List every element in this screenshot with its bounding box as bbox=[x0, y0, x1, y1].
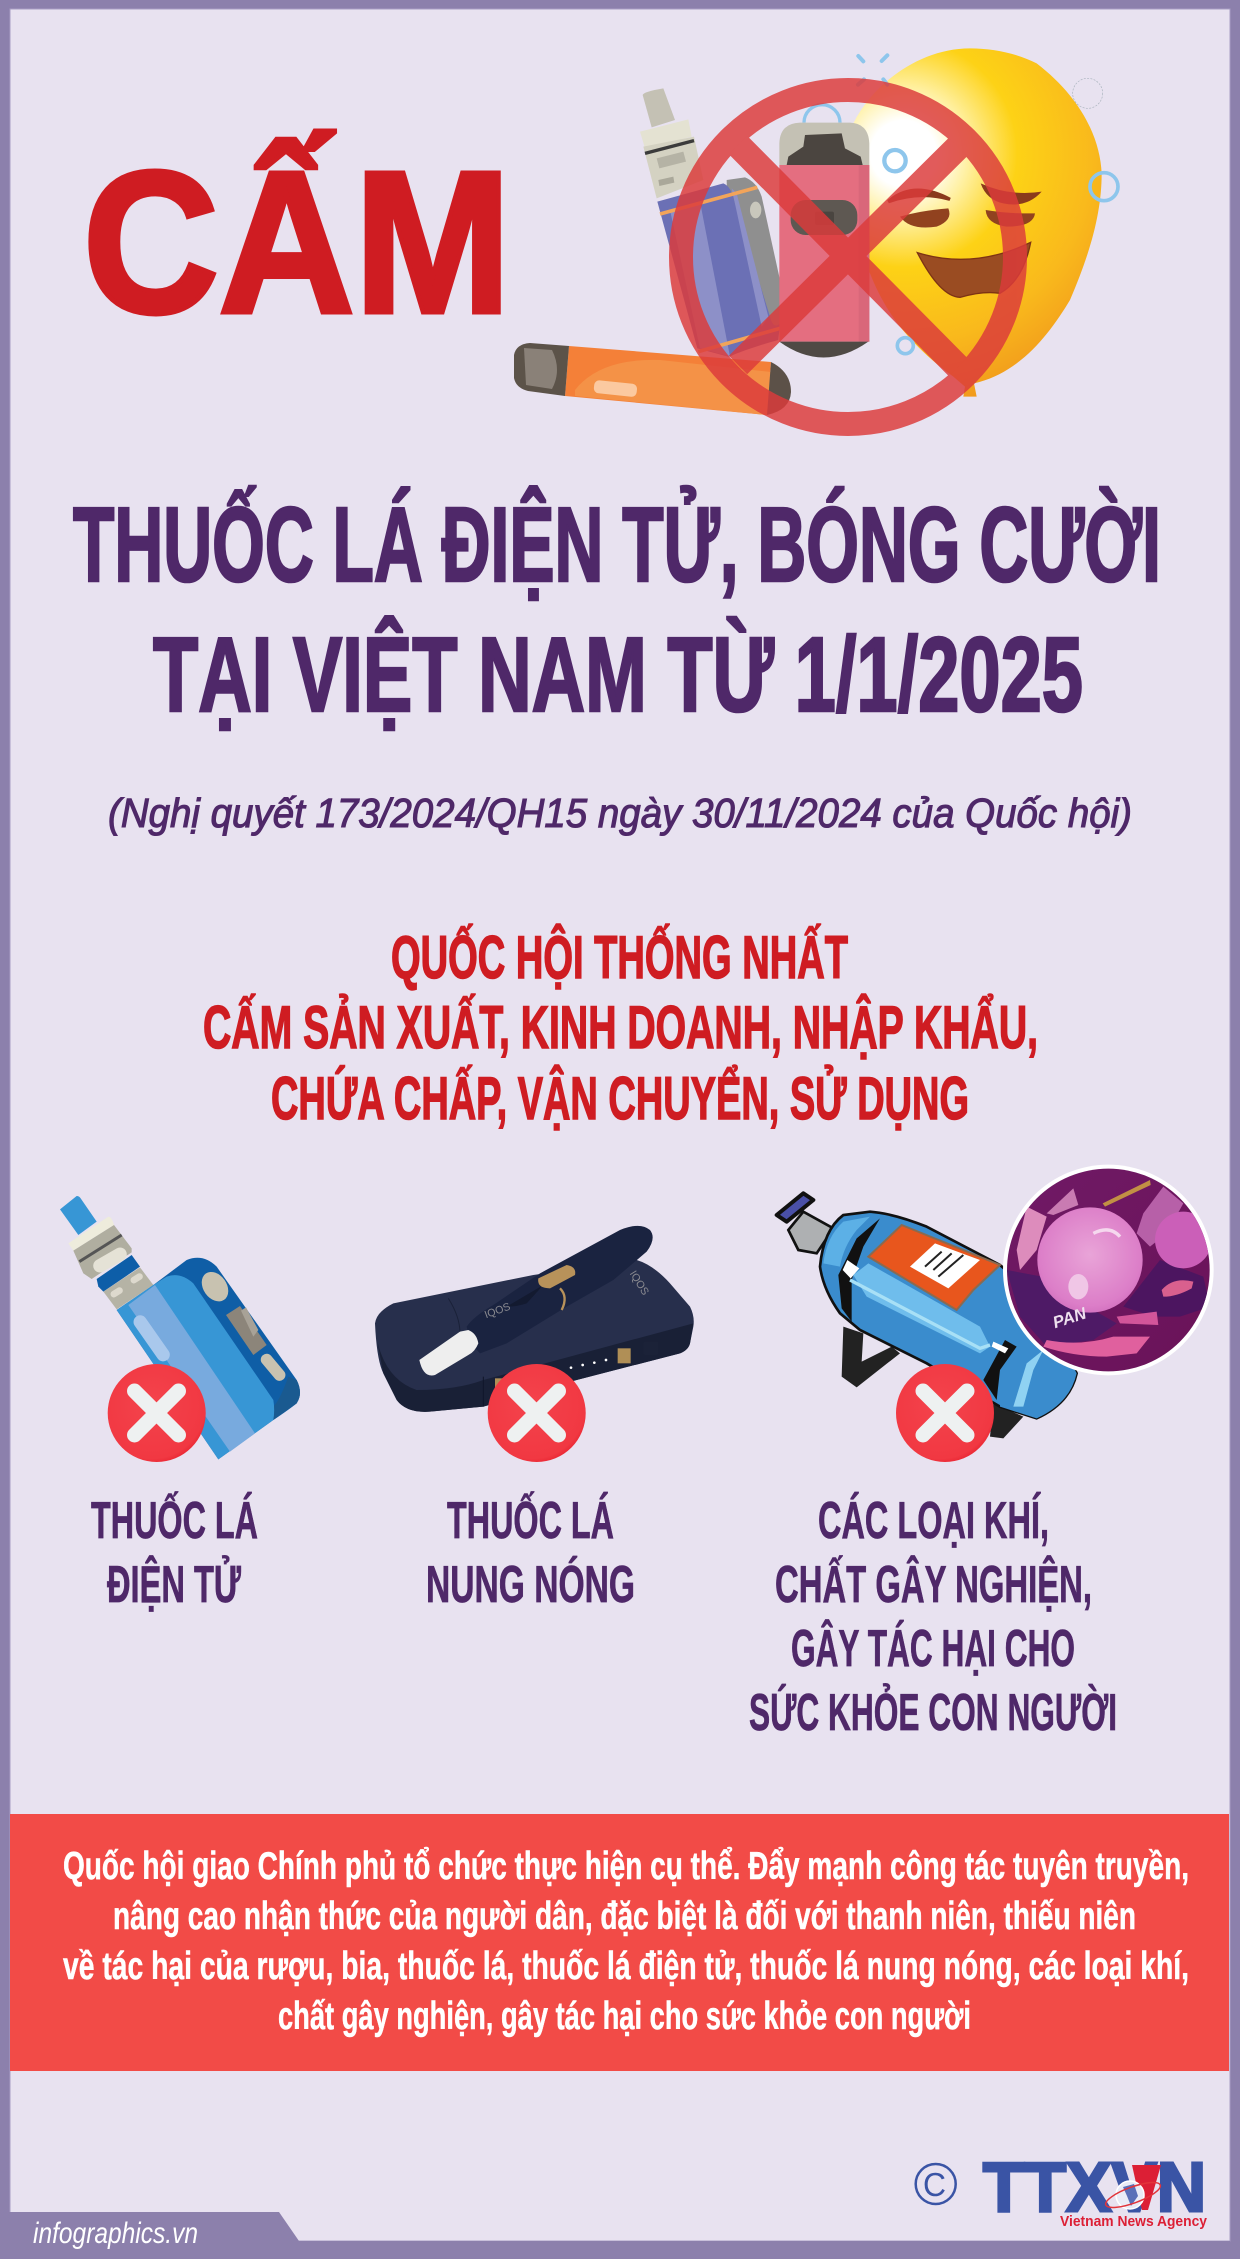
label: NUNG NÓNG bbox=[426, 1556, 635, 1614]
icon: red X badge bbox=[108, 1364, 206, 1462]
footer tab: infographics.vn bbox=[0, 2212, 1230, 2259]
icon: red X badge bbox=[896, 1364, 994, 1462]
logo: TTXVN Vietnam News Agency: TTXVN bbox=[983, 2148, 1206, 2226]
label bbox=[749, 1492, 1117, 1742]
icon: navy heated tobacco device bbox=[375, 1226, 694, 1412]
red heading: National Assembly ban: QUỐC HỘI THỐNG NHẤT bbox=[391, 924, 848, 991]
label bbox=[91, 1491, 258, 1614]
icon: orange disposable vape bbox=[514, 343, 791, 415]
panel: government task callout: chất gây nghiện, gây tác hại cho sức khỏe con người bbox=[278, 1995, 971, 2038]
heading: CẤM: CẤM bbox=[83, 129, 511, 355]
icon: navy heated tobacco device: IQOS bbox=[627, 1269, 651, 1298]
panel: government task callout bbox=[10, 1814, 1229, 2071]
label: THUỐC LÁ bbox=[91, 1491, 258, 1550]
subtitle: resolution reference: (Nghị quyết 173/2024/QH15 ngày 30/11/2024 của Quốc hội) bbox=[108, 790, 1132, 836]
hero illustration: banned vapes and balloon bbox=[514, 48, 1118, 424]
photo: people inhaling balloons: PAN bbox=[1050, 1303, 1089, 1332]
item: heated tobacco bbox=[375, 1226, 694, 1614]
logo: TTXVN Vietnam News Agency: Vietnam News Agency bbox=[1060, 2213, 1208, 2230]
title bbox=[73, 486, 1161, 734]
icon: grey and blue vape mod bbox=[640, 88, 780, 357]
icon: blue nitrous gas tank bbox=[777, 1193, 1077, 1438]
icon: blue vape bbox=[60, 1196, 300, 1459]
item: laughing gas and harmful substances bbox=[749, 1165, 1214, 1742]
red heading: National Assembly ban bbox=[203, 924, 1038, 1132]
label bbox=[426, 1491, 635, 1614]
logo: TTXVN Vietnam News Agency: C bbox=[923, 2166, 946, 2203]
icon: pink pod device bbox=[779, 123, 869, 357]
icon: prohibition sign bbox=[681, 90, 1015, 424]
label: ĐIỆN TỬ bbox=[107, 1555, 242, 1614]
label: THUỐC LÁ bbox=[447, 1491, 614, 1550]
label: CÁC LOẠI KHÍ, bbox=[818, 1492, 1049, 1550]
item: e-cigarette bbox=[60, 1196, 300, 1614]
icon: smiling yellow balloon bbox=[804, 48, 1118, 397]
footer tab: infographics.vn: infographics.vn bbox=[33, 2217, 198, 2250]
icon: red X badge bbox=[488, 1364, 586, 1462]
icon: navy heated tobacco device: IQOS bbox=[483, 1301, 512, 1321]
photo: people inhaling balloons bbox=[1003, 1165, 1214, 1375]
